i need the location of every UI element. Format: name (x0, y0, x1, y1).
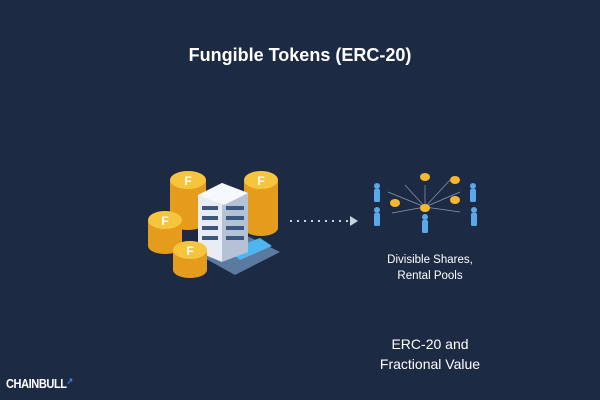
label: ERC-20 fractional value: Fractional Value (380, 356, 480, 372)
label: ERC-20 fractional value: ERC-20 and (391, 336, 469, 352)
coin stack front: F (186, 244, 194, 258)
label: divisible shares (387, 254, 473, 282)
coin stack right: F (257, 174, 265, 188)
network: holders and coins (374, 173, 477, 233)
label: divisible shares: Divisible Shares, (387, 254, 473, 266)
label: ERC-20 fractional value (380, 336, 480, 372)
illustration: building with coins (148, 171, 358, 278)
coin stack front left (148, 211, 182, 254)
label: divisible shares: Rental Pools (397, 270, 463, 282)
people (374, 183, 477, 233)
coin stack back left (170, 171, 206, 230)
arrow dotted (290, 216, 358, 226)
logo: CHAINBULL↗ (6, 376, 73, 391)
title: Fungible Tokens (ERC-20) (189, 45, 411, 65)
coin stack front left: F (161, 214, 169, 228)
building base (190, 230, 280, 275)
building (198, 183, 248, 262)
coin stack right (244, 171, 278, 236)
coin stack back left: F (184, 174, 192, 188)
coins (390, 173, 460, 212)
coin stack front (173, 241, 207, 278)
